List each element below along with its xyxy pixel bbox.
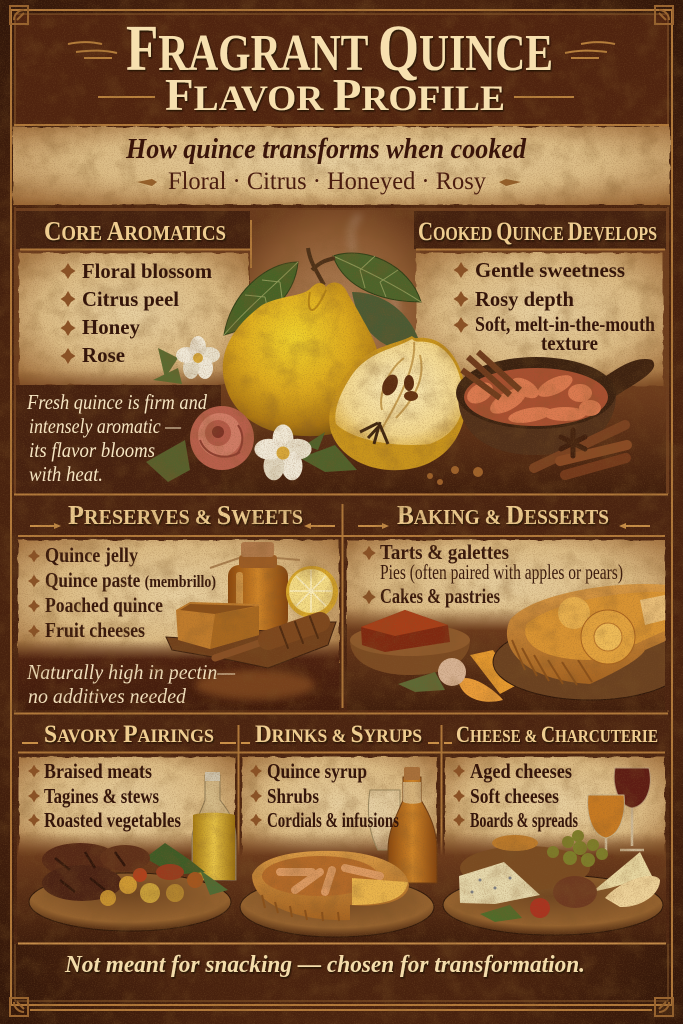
icon: left leaf — [224, 262, 298, 335]
panel: baking parchment — [347, 540, 665, 640]
list: preserves — [28, 543, 216, 642]
left header bar — [16, 211, 250, 249]
panel: savory parchment — [19, 757, 235, 862]
list: baking — [362, 540, 623, 608]
callout: pectin: Naturally high in pectin— — [26, 660, 235, 684]
heading: cooked quince develops: COOKED QUINCE DEVELOPS — [418, 217, 657, 246]
list: drinks — [250, 759, 399, 832]
subtitle: How quince transforms when cooked — [125, 134, 527, 165]
soil specks — [195, 670, 315, 700]
heading ornaments — [22, 742, 452, 744]
icon: whole quince — [223, 283, 382, 436]
icon: white flower — [254, 424, 357, 480]
section: pairings — [14, 712, 669, 944]
list: core aromatics: Honey — [82, 315, 140, 339]
icon: lemon half — [286, 566, 338, 618]
table surface — [16, 370, 666, 493]
icon: rose — [146, 406, 254, 482]
heading: core aromatics: CORE AROMATICS — [44, 216, 226, 246]
list: preserves: Poached quince — [45, 593, 163, 617]
icon: wine glasses — [588, 768, 650, 852]
icon: syrup bottle — [388, 767, 437, 883]
icon: jelly bowl — [350, 610, 470, 675]
panel: drinks parchment — [242, 757, 437, 862]
heading: baking: BAKING & DESSERTS — [397, 500, 609, 530]
heading: cheese: CHEESE & CHARCUTERIE — [456, 722, 658, 747]
panel: core aromatics parchment — [19, 253, 248, 385]
steam — [350, 215, 396, 345]
list: cooked quince develops: Gentle sweetness — [475, 258, 625, 282]
icon: syrup jug — [368, 790, 400, 850]
callout: fresh quince — [26, 390, 207, 486]
icon: right leaf — [333, 253, 421, 302]
title line 2: FLAVOR PROFILE — [165, 70, 505, 120]
icon: savory pie plate — [240, 851, 434, 937]
callout: pectin: no additives needed — [28, 684, 186, 708]
title flourishes — [68, 42, 615, 97]
footer rule — [18, 942, 666, 944]
footer tagline: Not meant for snacking — chosen for transformation. — [64, 952, 585, 978]
icon: honey dipper — [215, 617, 320, 658]
list: preserves: Quince paste (membrillo) — [45, 568, 216, 592]
icon: quince paste block — [176, 602, 259, 649]
header texture — [14, 14, 669, 126]
list: savory — [28, 759, 181, 832]
list: core aromatics: Citrus peel — [82, 287, 179, 311]
heading: drinks: DRINKS & SYRUPS — [255, 721, 422, 748]
title line 1: FRAGRANT QUINCE — [126, 12, 553, 85]
panel: subtitle parchment — [13, 124, 670, 207]
heading: savory: SAVORY PAIRINGS — [44, 721, 214, 748]
callout: fresh quince: Fresh quince is firm and — [26, 390, 207, 414]
callout: fresh quince: its flavor blooms — [29, 438, 155, 462]
right header bar — [414, 211, 666, 249]
list: baking: Cakes & pastries — [380, 584, 500, 608]
center backdrop — [250, 210, 420, 388]
panel: preserves soil — [18, 640, 339, 710]
heading: preserves: PRESERVES & SWEETS — [68, 500, 303, 530]
icon: honey jar — [210, 542, 300, 630]
icon: halved quince — [329, 336, 466, 470]
icon: skillet with cooked quince — [456, 352, 654, 455]
list: savory: Tagines & stews — [44, 784, 159, 808]
icon: oil bottle — [192, 772, 236, 880]
section: aromatics — [14, 208, 669, 493]
panel: cheese parchment — [445, 757, 665, 862]
list: cheese — [453, 759, 578, 832]
list: cooked quince develops: Soft, melt-in-the-mouth — [475, 312, 655, 336]
list: cooked quince develops: texture — [541, 331, 598, 355]
list: drinks: Quince syrup — [267, 759, 367, 783]
icon: wooden board — [166, 622, 336, 668]
list: core aromatics — [60, 259, 212, 367]
list: preserves: Fruit cheeses — [45, 618, 145, 642]
callout: fresh quince: with heat. — [29, 462, 103, 486]
panel: preserves parchment — [18, 540, 339, 662]
section rules — [14, 714, 668, 855]
list: cheese: Soft cheeses — [470, 784, 559, 808]
list: core aromatics: Floral blossom — [82, 259, 212, 283]
icon: plate and tart — [493, 584, 683, 700]
icon: cheese board — [443, 830, 663, 935]
callout: pectin — [26, 660, 235, 708]
list: cheese: Boards & spreads — [470, 808, 578, 832]
callout: fresh quince: intensely aromatic — — [29, 414, 181, 438]
list: drinks: Cordials & infusions — [267, 808, 399, 832]
flavor words: Floral · Citrus · Honeyed · Rosy — [168, 168, 486, 195]
section rules — [14, 494, 668, 708]
panel: cooked quince parchment — [416, 253, 663, 386]
icon: braised meat plate — [29, 843, 231, 931]
list: drinks: Shrubs — [267, 784, 319, 808]
crumbs — [427, 466, 483, 485]
icon: orange slices — [398, 650, 517, 702]
list: core aromatics: Rose — [82, 343, 125, 367]
left table dark — [16, 385, 221, 493]
list: cooked quince develops — [454, 258, 655, 355]
title — [126, 12, 553, 120]
icon: stem — [308, 248, 335, 285]
panel: baking table — [347, 608, 665, 710]
section: preserves and baking — [14, 494, 683, 710]
icon: lower leaf — [352, 292, 422, 352]
list: preserves: Quince jelly — [45, 543, 138, 567]
list: cooked quince develops: Rosy depth — [475, 287, 574, 311]
table surface — [17, 832, 666, 942]
icon: cinnamon and star anise — [534, 425, 627, 475]
list: baking: Tarts & galettes — [380, 540, 509, 564]
list: savory: Braised meats — [44, 759, 152, 783]
list: savory: Roasted vegetables — [44, 808, 181, 832]
list: cheese: Aged cheeses — [470, 759, 572, 783]
header rules — [20, 220, 665, 268]
icon: blossom cluster — [153, 336, 220, 384]
flavor word ornaments — [137, 179, 521, 186]
